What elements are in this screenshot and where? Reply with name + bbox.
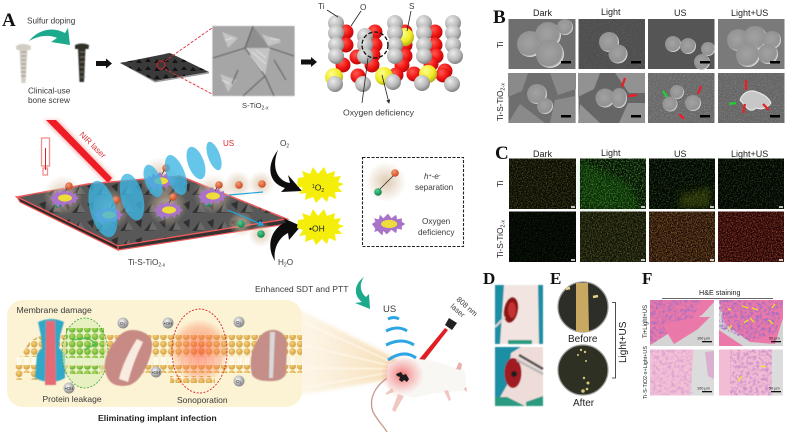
- substrate plate: [17, 176, 287, 250]
- lattice: gray titanium atoms: [327, 15, 463, 92]
- arrow: [301, 57, 317, 67]
- starburst: singlet oxygen: O: [315, 182, 322, 192]
- TiS dark: [509, 212, 576, 262]
- label: sonoporation: Sonoporation: [177, 395, 228, 405]
- hole-electron pairs with oxygen deficiency: [43, 157, 233, 229]
- Ti light+US: [718, 19, 784, 69]
- starburst: singlet oxygen: 2: [321, 188, 324, 194]
- Ti dark: [509, 158, 576, 209]
- plate before: [558, 282, 608, 332]
- column headings: Dark: [533, 149, 553, 159]
- TiS US: [649, 212, 715, 262]
- legend: h+ e- separation: separation: [415, 183, 454, 192]
- blue charge arrows: [228, 192, 263, 225]
- free holes: [228, 211, 274, 247]
- starburst: hydroxyl radical: [297, 209, 344, 245]
- label: protein leakage: Protein leakage: [42, 394, 102, 404]
- panel: light beams from rat to membrane: [300, 310, 397, 395]
- row label Ti-S-TiO2-x: 2-x: [500, 83, 506, 91]
- rat tail: [372, 375, 393, 432]
- row label Ti-S-TiO2-x: 2-x: [500, 220, 506, 228]
- lattice: red oxygen atoms: [336, 24, 452, 84]
- dashed legend box: [362, 158, 464, 246]
- panel label A: A: [2, 10, 16, 31]
- starburst: singlet oxygen: 1: [312, 184, 315, 190]
- Ti light: [580, 158, 646, 209]
- label: NIR laser: NIR laser: [78, 130, 108, 160]
- panel F: H&E histology: [643, 288, 783, 399]
- label: H2O: O: [287, 258, 293, 267]
- Ti US: [648, 19, 715, 70]
- arrow: [96, 58, 112, 68]
- column headings: [533, 148, 768, 159]
- label: before: Before: [568, 334, 598, 345]
- label: light+US: Light+US: [618, 321, 629, 363]
- scale bars: [571, 207, 783, 260]
- icon: laser head: [445, 318, 457, 330]
- panel: eliminating implant infection membrane: [7, 300, 302, 407]
- protein channel blue: [35, 319, 65, 385]
- NIR laser beam: [44, 120, 114, 185]
- rat body: [387, 359, 467, 398]
- lipid heads upper: [20, 335, 302, 357]
- rat legs: [386, 388, 451, 412]
- panel D: surgical photos: [495, 285, 543, 406]
- TiS dark: [508, 73, 576, 123]
- curved black arrow to singlet oxygen: [270, 150, 302, 192]
- lipid tails: [16, 357, 296, 369]
- label: after: After: [573, 398, 595, 409]
- heading H&E staining: H&E staining: [699, 288, 741, 297]
- implant wound photo top: [495, 285, 543, 344]
- label: O2: O: [280, 139, 286, 148]
- row label Ti+Light+US: Ti+Light+US: [643, 305, 649, 338]
- label: H2O: 2: [284, 262, 287, 268]
- Ti light+US: [718, 158, 784, 209]
- hydroxyl and oxygen radicals: [64, 316, 244, 394]
- starburst: singlet oxygen: [297, 167, 344, 203]
- label: oxygen deficiency: Oxygen deficiency: [343, 108, 415, 118]
- lattice: yellow sulfur atoms: [325, 28, 437, 86]
- column headings: Light+US: [731, 149, 768, 159]
- TiS light+US: [718, 73, 784, 123]
- column headings: Dark: [533, 8, 553, 18]
- column headings: US: [674, 149, 687, 159]
- hydroxyl and oxygen radicals: •OH: [65, 386, 73, 391]
- icon: curved teal arrow: [29, 28, 70, 45]
- row label Ti-S-TiO2-x+Light+US: Ti-S-TiO2-x+Light+US: [643, 346, 649, 399]
- lipid heads lower: [15, 365, 302, 373]
- rat ear and snout: [456, 362, 467, 392]
- panel A top: sulfur doping workflow: [16, 2, 463, 118]
- row label Ti-S-TiO2-x: Ti-S-TiO: [496, 228, 505, 258]
- label: O2: 2: [286, 144, 289, 150]
- icon: doped black screw: [75, 44, 89, 82]
- hydroxyl and oxygen radicals: O₂: [236, 379, 242, 384]
- lower heads second row: [15, 372, 215, 383]
- laser beam: [416, 328, 448, 366]
- column headings: Light: [601, 7, 621, 17]
- protein: right barrel: [251, 330, 287, 381]
- TiS US: [648, 73, 714, 123]
- row label Ti: Ti: [496, 180, 505, 187]
- legend: oxygen deficiency: [372, 214, 455, 237]
- dashed circle: oxygen deficiency: [362, 32, 388, 58]
- panel A top: sulfur doping workflow: S: [409, 2, 415, 11]
- label: laser: laser: [449, 302, 467, 320]
- icon: ultrasound waves: [386, 318, 416, 360]
- zoom lines: [165, 28, 212, 94]
- panel label F: F: [642, 269, 652, 288]
- column headings: Light: [601, 148, 621, 158]
- label: Ti-S-TiO2-x: Ti-S-TiO: [128, 258, 158, 267]
- TiS light: [580, 212, 646, 262]
- column headings: Light+US: [731, 8, 768, 18]
- micrograph TiS 50 um: 50 µm: [769, 386, 780, 390]
- icon: clinical bone screw: [16, 44, 31, 83]
- rat illustration: [372, 355, 467, 432]
- label: S-TiO2-x: S-TiO: [242, 101, 262, 110]
- label: S-TiO2-x: 2-x: [262, 106, 269, 112]
- plate after: [558, 345, 608, 395]
- icon: teal curved arrow: [355, 277, 370, 309]
- implant wound photo bottom: [495, 347, 543, 406]
- panel A middle: Ti-S-TiO2-x sono and photo catalysis: [17, 120, 464, 268]
- legend: h+ e- separation: +: [429, 173, 432, 179]
- legend: h+ e- separation: -: [439, 173, 441, 179]
- label: H2O: H: [278, 258, 284, 267]
- micrograph Ti 100 um: 100 µm: [697, 336, 710, 340]
- curved black arrow to hydroxyl radical: [270, 218, 301, 261]
- legend: h+ e- separation: [366, 162, 454, 202]
- micrograph Ti 50 um: 50 µm: [769, 336, 780, 340]
- panel label E: E: [550, 269, 561, 288]
- sonoporation damage zone: [170, 309, 230, 393]
- column headings: US: [674, 8, 687, 18]
- label: clinical-use bone screw: Clinical-use: [28, 86, 70, 96]
- label: Ti-S-TiO2-x: 2-x: [158, 262, 166, 268]
- hydroxyl and oxygen radicals: O₂: [120, 321, 126, 326]
- free electrons: [224, 171, 274, 199]
- Ti dark: [508, 19, 576, 69]
- cream background: [7, 300, 302, 407]
- legend: h+ e- separation: -e: [431, 172, 439, 181]
- row label Ti: Ti: [496, 41, 505, 48]
- ultrasound wave ellipses: [83, 140, 225, 240]
- hydroxyl and oxygen radicals: O₂: [236, 320, 242, 325]
- label: clinical-use bone screw: bone screw: [28, 96, 70, 105]
- bracket: [612, 302, 616, 378]
- label: 808 nm laser: 808 nm: [455, 295, 479, 318]
- legend: oxygen deficiency: deficiency: [418, 228, 455, 237]
- Ti light: [578, 19, 645, 69]
- red glow: [380, 355, 424, 395]
- panel C: live dead fluorescence: [496, 148, 784, 262]
- starburst: hydroxyl radical: •OH: [309, 224, 325, 234]
- TiS light: [578, 73, 645, 123]
- caption: eliminating implant infection: Eliminating implant infection: [98, 413, 217, 423]
- icon: thermometer: [42, 138, 50, 175]
- legend: h+ e- separation: h: [424, 172, 429, 181]
- panel E: agar plates: [558, 282, 629, 409]
- TiO2 coated plate: [120, 53, 209, 82]
- panel A top: sulfur doping workflow: O: [360, 3, 366, 12]
- panel label B: B: [493, 7, 506, 28]
- panel B: SEM micrographs: [496, 7, 784, 123]
- enhanced SDT and PTT label: Enhanced SDT and PTT: [255, 284, 349, 294]
- column headings: [533, 7, 768, 18]
- label: sulfur doping: Sulfur doping: [27, 16, 76, 26]
- protein leakage damage zone: [62, 318, 108, 388]
- label: membrane damage: Membrane damage: [16, 305, 92, 315]
- legend: oxygen deficiency: Oxygen: [422, 217, 451, 226]
- atom pointer arrows: [327, 10, 411, 103]
- micrograph TiS 100 um: 100 µm: [697, 386, 710, 390]
- label: US: US: [223, 139, 234, 148]
- label: US: US: [383, 304, 396, 315]
- panel label C: C: [495, 143, 509, 164]
- hydroxyl and oxygen radicals: •OH: [152, 370, 160, 375]
- heading rule: [662, 298, 773, 300]
- protein: pink barrel: [105, 330, 152, 386]
- labels: Ti O S: Ti: [318, 2, 325, 11]
- hydroxyl and oxygen radicals: •OH: [164, 321, 172, 326]
- SEM image S-TiO2-x: [212, 26, 294, 96]
- Ti US: [649, 158, 715, 209]
- implant dark spot: [396, 372, 409, 382]
- panel label D: D: [483, 269, 495, 288]
- TiS light+US: [718, 212, 784, 262]
- row label Ti-S-TiO2-x: Ti-S-TiO: [496, 91, 505, 121]
